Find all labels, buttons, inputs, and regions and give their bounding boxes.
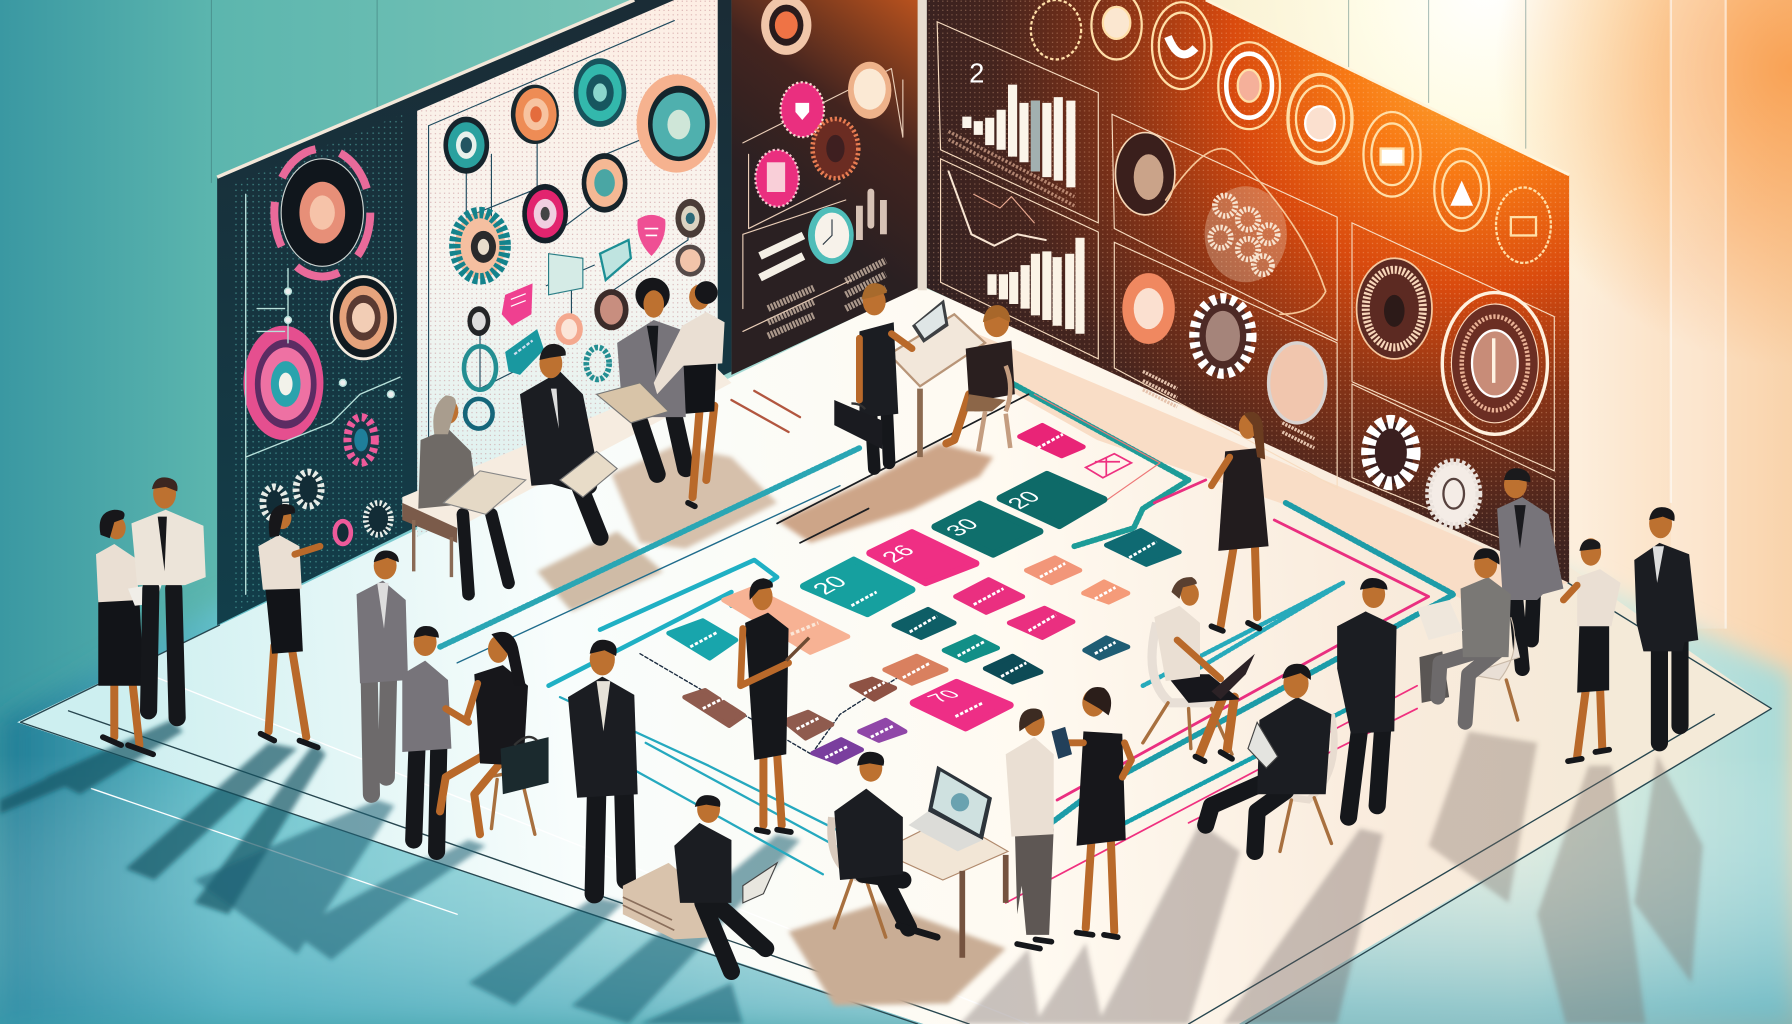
panel: white flow diagram	[417, 0, 718, 537]
body	[1206, 664, 1331, 851]
person	[834, 752, 937, 937]
desk with laptop	[889, 299, 985, 457]
card: navy	[1085, 638, 1128, 658]
card: brown	[784, 712, 832, 738]
icon: large peach badge	[637, 74, 717, 173]
icon: black bag	[501, 737, 549, 794]
card: pink figures	[870, 533, 976, 583]
dashboard cards on floor	[669, 425, 1179, 762]
person: man in black standing centre right	[1337, 578, 1397, 817]
card: brown left	[685, 690, 744, 726]
card: dark teal 30: 30	[939, 515, 984, 540]
icon: briefcase	[834, 400, 882, 449]
person: woman with ponytail	[1006, 708, 1054, 949]
card: brown	[851, 679, 895, 699]
small cards grid	[851, 558, 1128, 699]
panel: central dark infographics wall	[731, 0, 918, 375]
person: man seated at desk	[946, 305, 1015, 451]
chair	[1143, 623, 1232, 754]
panel: orange control wall	[918, 0, 1569, 583]
person: woman in vest	[859, 283, 912, 469]
icon: teal blob tag	[505, 329, 544, 375]
person: man seated in front right	[1206, 664, 1334, 851]
icon: teal fan gear	[455, 213, 505, 279]
person: man in black suit seated	[520, 344, 617, 537]
card: peach brown	[885, 656, 946, 683]
card: dark teal	[894, 609, 954, 638]
person: woman in blouse	[654, 281, 725, 506]
icon: teal clock	[808, 207, 854, 264]
left wall	[217, 0, 918, 625]
card: pink 70	[913, 682, 1010, 728]
card: large peach	[723, 589, 848, 653]
card: dark teal 200: 20	[1001, 487, 1046, 512]
icon: concentric peach ring	[331, 277, 395, 359]
card: teal 20	[803, 560, 912, 614]
panel: lower gears	[1352, 384, 1554, 560]
floor platform	[17, 286, 1771, 1024]
icon: pink list badge	[755, 150, 799, 207]
marker: pink outline tag	[1086, 454, 1131, 478]
person: woman walking on board	[1211, 412, 1269, 631]
card: teal 20: 20	[807, 572, 854, 598]
person: curly man	[597, 278, 686, 474]
floor circuit lines	[440, 383, 1454, 903]
panel: line and bar chart	[941, 159, 1098, 359]
text block placeholders	[760, 235, 886, 336]
right wall	[918, 0, 1569, 583]
group: people on left bench	[402, 278, 731, 594]
card: pink lower	[1009, 608, 1073, 638]
card: pink	[955, 579, 1023, 613]
icon: pink burst	[347, 417, 375, 463]
person: grey-haired woman seated	[418, 395, 526, 594]
icon: pink ring node	[522, 184, 568, 243]
panel: gear and magnifier row	[1114, 242, 1337, 488]
cast shadows	[0, 443, 1703, 1024]
chair	[1266, 714, 1334, 851]
person: man in black suit far right	[1634, 507, 1698, 743]
group: far left people	[96, 477, 320, 754]
icon: cream badge	[848, 62, 891, 119]
panel: bar chart	[937, 22, 1098, 223]
bag and chair	[1419, 617, 1520, 720]
card: dark	[985, 656, 1041, 682]
icon: pink drop tag	[637, 215, 665, 256]
icon: teal ring node	[443, 117, 489, 174]
person: woman seated with laptop	[1143, 577, 1255, 761]
person: man in grey suit right	[1497, 468, 1563, 669]
group: seated man right	[1417, 548, 1520, 722]
group: people at back desk	[834, 283, 1015, 469]
card: pink figures: 26	[875, 541, 920, 566]
panel: gears and brain diagram	[1112, 114, 1337, 341]
person: woman in beige far right	[1563, 538, 1621, 761]
group: foreground desk and man	[831, 752, 1008, 958]
chair	[831, 817, 886, 937]
icon: orange ring node	[511, 85, 559, 144]
person: man with tie	[131, 477, 206, 718]
top row of ring badges	[1031, 0, 1551, 263]
person: woman with tablet	[96, 510, 162, 754]
group: couple at left	[357, 551, 549, 851]
card: peach small	[1083, 582, 1128, 602]
icons: small flow nodes	[464, 199, 705, 429]
person: woman seated in black	[440, 632, 535, 834]
icon: peach dark node	[582, 153, 627, 213]
card: teal	[944, 637, 998, 661]
person: woman in white blouse	[258, 504, 320, 747]
icon: pink speech tag	[502, 283, 533, 326]
person: man in grey suit	[357, 551, 408, 794]
body	[1154, 577, 1255, 761]
person: woman in black dress on board	[741, 578, 809, 832]
person	[1417, 548, 1511, 722]
card: dark teal 200	[1000, 474, 1104, 526]
circuit traces on dark wall	[246, 194, 400, 594]
icon: small gears	[263, 472, 391, 544]
icon: pink shield badge	[781, 82, 824, 137]
desk	[880, 817, 1008, 958]
bench	[402, 366, 731, 577]
card: pink top label	[1019, 425, 1083, 456]
card: purple lower	[813, 739, 862, 762]
icon: large pink ring dial	[274, 149, 370, 277]
person	[674, 795, 777, 971]
icon: pink spiral target	[243, 326, 323, 440]
card: pink 70: 70	[922, 687, 966, 705]
person: woman in black dress centre front	[1051, 687, 1131, 937]
group: foreground bench and man	[623, 795, 777, 971]
icon: orange dotted blob	[813, 119, 858, 178]
icon: teal rings node	[574, 58, 626, 127]
icon: laptop	[909, 766, 992, 851]
bench	[623, 863, 718, 939]
ground plane	[0, 286, 1792, 1024]
card: teal right label	[1106, 530, 1179, 565]
icon: small label screens	[549, 240, 631, 295]
panel: dark circuit wall	[217, 0, 731, 625]
icon: peach hub	[761, 0, 811, 55]
chart label: 2	[969, 57, 984, 88]
person: man in black suit foreground	[568, 640, 638, 894]
panel: big dial	[1352, 223, 1554, 471]
person: short man	[402, 626, 469, 851]
card: teal left label	[669, 621, 736, 658]
icon: mini bars	[856, 189, 887, 240]
card: peach	[1026, 558, 1080, 583]
card: purple	[859, 720, 905, 741]
card: dark teal 30	[935, 504, 1040, 554]
